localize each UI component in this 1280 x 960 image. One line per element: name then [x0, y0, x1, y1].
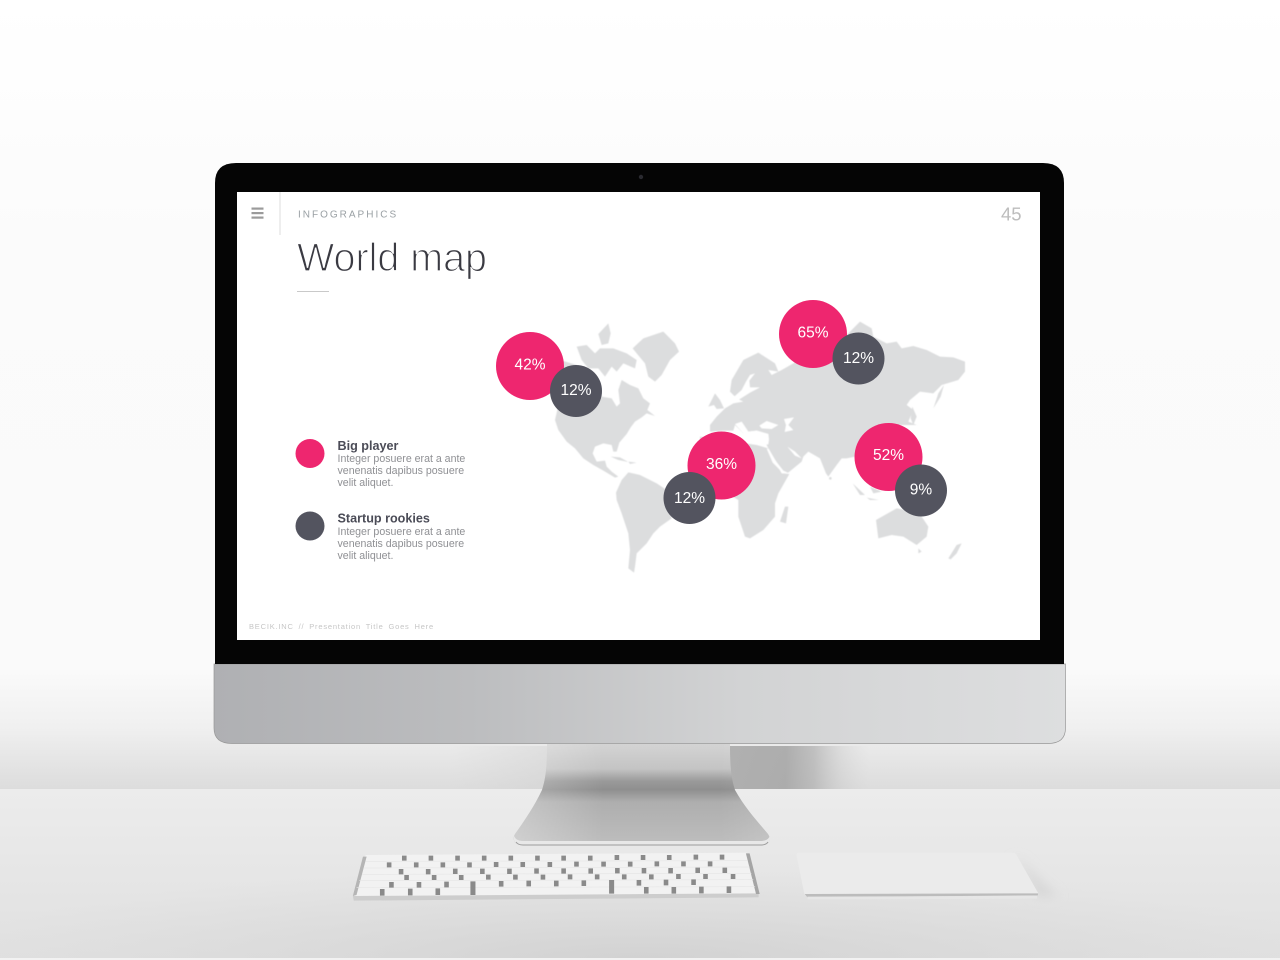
legend: big player: Big player [338, 439, 398, 453]
map: eurasia africa australia [700, 322, 965, 559]
monitor body [214, 163, 1066, 744]
trackpad surface [796, 853, 1038, 895]
legend: startup rookies [296, 512, 468, 562]
bubble pair: north america: 42% [514, 356, 546, 374]
bubble pair: africa: 12% [674, 490, 705, 507]
legend: startup rookies: Integer posuere erat a ante [338, 526, 465, 538]
bubble pair: asia [854, 423, 947, 516]
keyboard key gaps [380, 855, 735, 896]
keyboard [353, 853, 760, 901]
bubble pair: africa [664, 432, 756, 524]
bubble pair: asia: 52% [873, 447, 904, 464]
bubble pair: north america: 12% [560, 382, 592, 399]
photo bottom strip [0, 958, 1280, 960]
keyboard row lines [357, 861, 755, 888]
monitor bezel [215, 163, 1064, 664]
legend: big player: velit aliquet. [338, 477, 393, 489]
title rule [297, 291, 329, 292]
bubble pair: north america [496, 332, 602, 417]
trackpad shadow [1015, 855, 1056, 897]
bubble pair: asia: 9% [910, 482, 932, 498]
page number: 45 [1001, 204, 1022, 224]
slide title: World map [297, 236, 487, 280]
monitor stand [514, 744, 770, 845]
legend: big player [296, 439, 468, 489]
monitor chin [214, 664, 1066, 744]
bubble pair: russia: 12% [843, 350, 874, 367]
slide eyebrow: INFOGRAPHICS [298, 210, 398, 220]
legend: startup rookies: venenatis dapibus posuere [338, 538, 464, 550]
legend: startup rookies: velit aliquet. [338, 550, 393, 562]
world map [555, 322, 965, 573]
map: inland seas [733, 373, 802, 473]
menu icon [252, 208, 264, 219]
trackpad [796, 853, 1056, 899]
legend: big player: Integer posuere erat a ante [338, 453, 465, 465]
screen header divider [280, 192, 281, 235]
keyboard body [354, 853, 759, 899]
background: desk surface [0, 789, 1280, 960]
bubble pair: africa: 36% [706, 456, 737, 473]
shadow behind the stand [450, 746, 870, 789]
bubble pair: russia: 65% [797, 324, 829, 342]
bubble pair: russia [779, 300, 884, 384]
legend: big player: venenatis dapibus posuere [338, 465, 464, 477]
map: americas and greenland [555, 323, 679, 573]
legend: startup rookies: Startup rookies [338, 512, 430, 526]
camera [639, 175, 643, 179]
footer: BECIK.INC // Presentation Title Goes Here [249, 622, 434, 631]
screen slide [237, 192, 1040, 640]
